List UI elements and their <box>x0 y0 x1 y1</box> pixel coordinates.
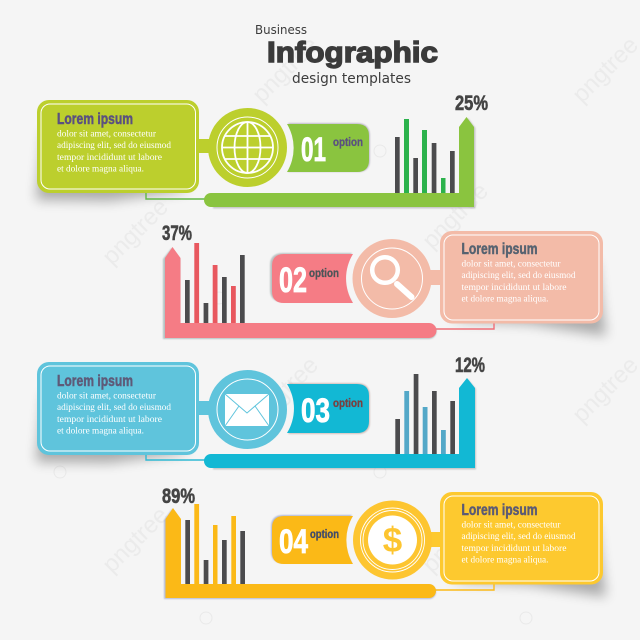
bar chart <box>185 504 245 584</box>
box body text: et dolore magna aliqua. <box>57 426 144 436</box>
percent label: 25% <box>455 92 488 115</box>
arrow base <box>204 117 476 208</box>
circle connector <box>429 532 441 547</box>
box heading: Lorem ipsum <box>57 111 133 128</box>
icon: envelope <box>208 370 287 449</box>
icon: dollar coin: $ <box>383 521 402 560</box>
option label: option <box>333 135 363 149</box>
watermarks: pngtree <box>247 32 324 108</box>
option tab <box>287 383 370 434</box>
bar chart <box>395 119 455 193</box>
box body text: tempor incididunt ut labore <box>57 152 162 163</box>
box heading: Lorem ipsum <box>57 373 133 390</box>
arrow base <box>204 378 476 470</box>
box body text <box>462 520 576 566</box>
icon: dollar coin <box>353 500 432 580</box>
title <box>255 22 438 87</box>
connector line <box>434 583 494 590</box>
panel: option 01 <box>36 92 488 208</box>
arrow base <box>163 247 437 339</box>
box body text: adipiscing elit, sed do eiusmod <box>57 140 171 151</box>
percent label: 37% <box>162 222 192 245</box>
text box <box>440 231 603 324</box>
connector line <box>434 322 494 329</box>
panel: option 04 <box>162 485 606 599</box>
option number: 04 <box>279 523 308 561</box>
title line: Infographic: Infographic <box>267 37 438 69</box>
bar chart <box>395 374 455 454</box>
percent label: 89% <box>162 485 195 508</box>
box heading: Lorem ipsum <box>462 502 538 519</box>
option label: option <box>333 396 363 410</box>
box body text: tempor incididunt ut labore <box>462 543 566 554</box>
circle connector <box>428 270 441 285</box>
panel: option 03 <box>36 354 485 470</box>
text box <box>37 362 199 455</box>
arrow base <box>164 508 436 599</box>
option tab <box>270 253 353 303</box>
box shadow <box>450 521 606 597</box>
panel: option 02 <box>162 222 606 339</box>
title line: design templates: design templates <box>292 71 411 87</box>
watermarks: pngtree <box>97 194 174 270</box>
watermarks: pngtree <box>417 178 494 254</box>
box body text: adipiscing elit, sed do eiusmod <box>462 531 576 542</box>
box body text <box>57 128 171 174</box>
box body text: dolor sit amet, consectetur <box>462 520 561 530</box>
option tab <box>271 515 353 564</box>
icon: magnifying glass <box>352 239 432 318</box>
box body text: et dolore magna aliqua. <box>462 554 548 566</box>
box shadow <box>450 260 606 336</box>
watermarks: pngtree <box>97 502 174 578</box>
watermarks: pngtree <box>247 352 324 428</box>
box body text: tempor incididunt ut labore <box>57 414 162 425</box>
option label: option <box>309 266 339 280</box>
title line: Business: Business <box>255 22 307 37</box>
option number: 02 <box>279 261 307 300</box>
bar chart <box>185 243 245 323</box>
text box <box>37 100 199 193</box>
option label: option <box>310 527 339 541</box>
box body text <box>462 258 576 304</box>
box body text <box>57 390 171 436</box>
option tab <box>287 123 370 172</box>
box body text: dolor sit amet, consectetur <box>462 258 561 270</box>
text box <box>440 492 603 584</box>
box body text: et dolore magna aliqua. <box>462 294 548 304</box>
box shadow <box>36 130 190 201</box>
icon: globe <box>208 108 287 187</box>
box body text: dolor sit amet, consectetur <box>57 128 157 140</box>
connector line <box>146 192 206 199</box>
box body text: tempor incididunt ut labore <box>462 282 566 293</box>
connector line <box>146 454 206 460</box>
box shadow <box>36 392 190 463</box>
percent label: 12% <box>455 354 485 377</box>
box body text: adipiscing elit, sed do eiusmod <box>57 402 171 413</box>
option number: 03 <box>301 392 330 430</box>
box heading: Lorem ipsum <box>462 241 538 258</box>
box body text: dolor sit amet, consectetur <box>57 390 157 402</box>
watermarks: pngtree <box>417 502 494 578</box>
circle connector <box>198 401 211 415</box>
box body text: et dolore magna aliqua. <box>57 164 144 174</box>
box body text: adipiscing elit, sed do eiusmod <box>462 270 576 281</box>
option number: 01 <box>301 131 326 169</box>
circle connector <box>198 139 211 153</box>
